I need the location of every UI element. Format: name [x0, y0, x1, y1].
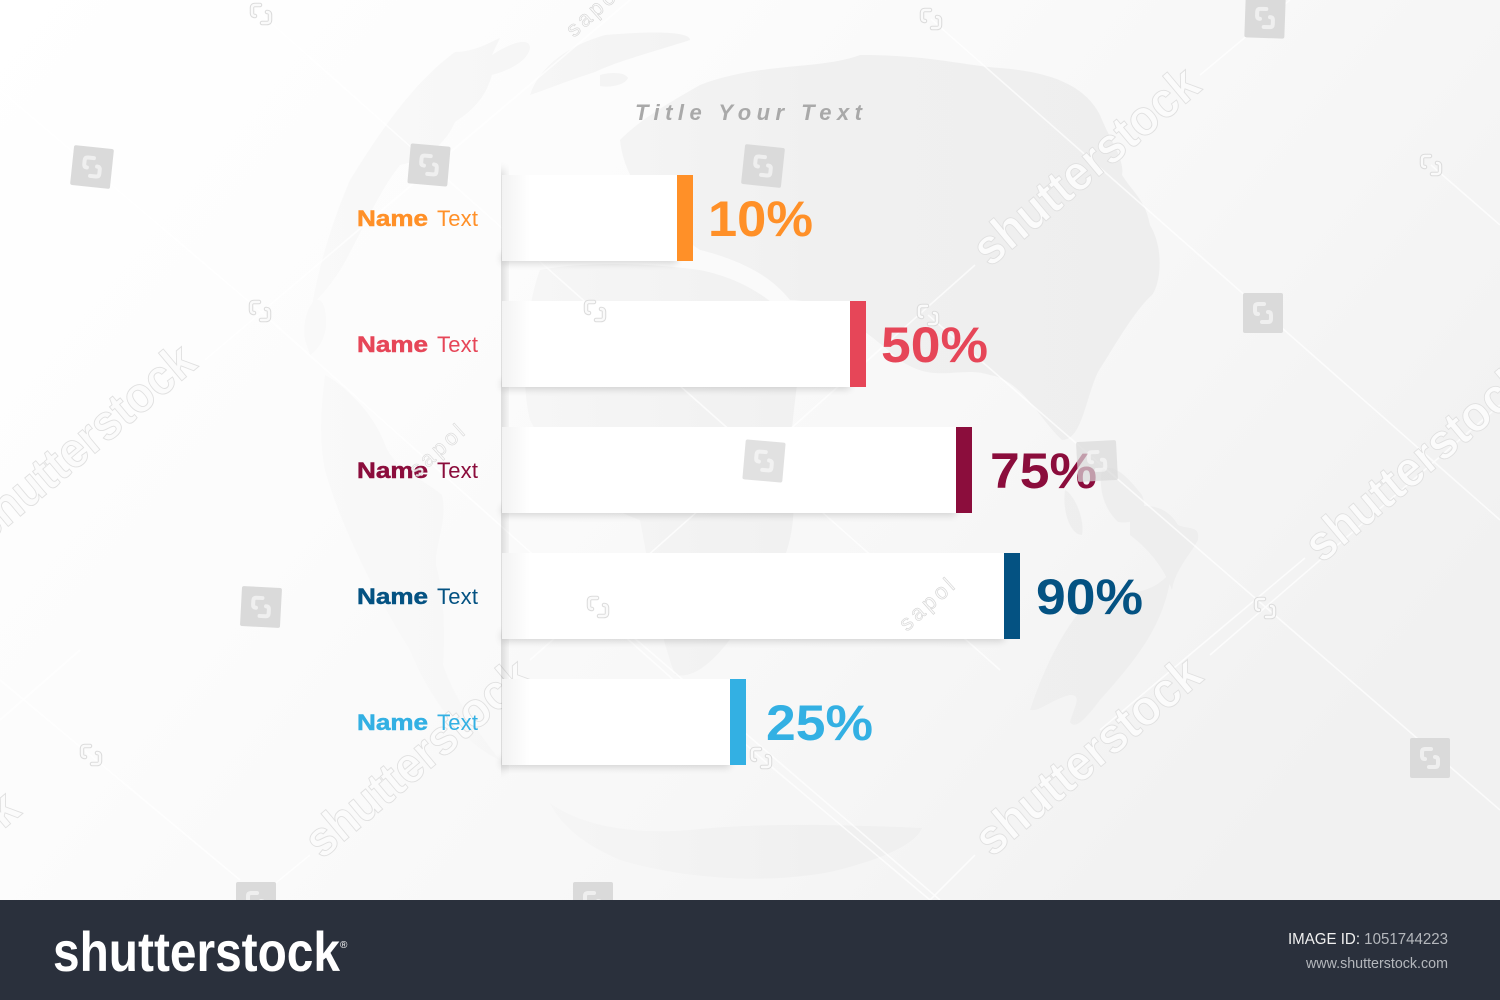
label 4	[357, 584, 478, 609]
watermark overlays on the bars: sapol	[404, 419, 469, 482]
value 90%: 90%	[1036, 569, 1143, 625]
label 3	[357, 458, 478, 483]
label 4: Name	[357, 584, 428, 609]
label 2: Text	[437, 332, 478, 357]
value 10%: 10%	[708, 191, 813, 247]
website: www.shutterstock.com	[1305, 956, 1448, 972]
continent: north west arc	[312, 38, 530, 305]
bar 5: 25%	[502, 679, 746, 767]
watermark: large logos: shutterstock	[293, 647, 542, 868]
chart title: Title Your Text	[635, 100, 864, 125]
continent: eurasia	[620, 55, 1160, 440]
image id: IMAGE ID: 1051744223	[1288, 931, 1448, 948]
label 5: Name	[357, 710, 428, 735]
label 3: Name	[357, 458, 428, 483]
island: northern	[600, 73, 628, 87]
watermark: large logos: shutterstock	[963, 645, 1212, 866]
footer bar	[0, 900, 1500, 1000]
value 25%: 25%	[766, 695, 873, 751]
continent: northern land	[530, 33, 690, 95]
accent: sky blue	[730, 679, 746, 765]
label 2: Name	[357, 332, 428, 357]
bar 2: 50%	[502, 301, 866, 389]
watermark overlays on the bars	[82, 0, 1440, 767]
watermark: large logos: shutterstock	[961, 55, 1210, 276]
value 50%: 50%	[881, 317, 988, 373]
label 4: Text	[437, 584, 478, 609]
watermark overlays on the bars: sapol	[894, 573, 959, 636]
label 1: Text	[437, 206, 478, 231]
footer logo: shutterstock	[53, 920, 341, 983]
label 3: Text	[437, 458, 478, 483]
accent: maroon	[956, 427, 972, 513]
label 5	[357, 710, 478, 735]
world globe map	[304, 33, 1198, 879]
islands: southeast asia	[1101, 468, 1144, 523]
continent: africa	[525, 264, 800, 676]
value 75%: 75%	[990, 443, 1097, 499]
continent: south america	[321, 375, 500, 760]
continent: antarctica	[550, 803, 922, 879]
bar 3: 75%	[502, 427, 972, 515]
accent: red	[850, 301, 866, 387]
label 5: Text	[437, 710, 478, 735]
continent: australia	[1030, 570, 1172, 725]
accent: navy	[1004, 553, 1020, 639]
bar 1: 10%	[502, 175, 693, 263]
label 1	[357, 206, 478, 231]
islands: sumatra	[1064, 490, 1083, 535]
island: left coast	[304, 300, 326, 355]
label 1: Name	[357, 206, 428, 231]
registered mark: ®	[340, 940, 348, 951]
panel shadow	[501, 168, 508, 772]
accent: orange	[677, 175, 693, 261]
bar 4: 90%	[502, 553, 1020, 641]
islands: east	[1130, 506, 1198, 590]
label 2	[357, 332, 478, 357]
